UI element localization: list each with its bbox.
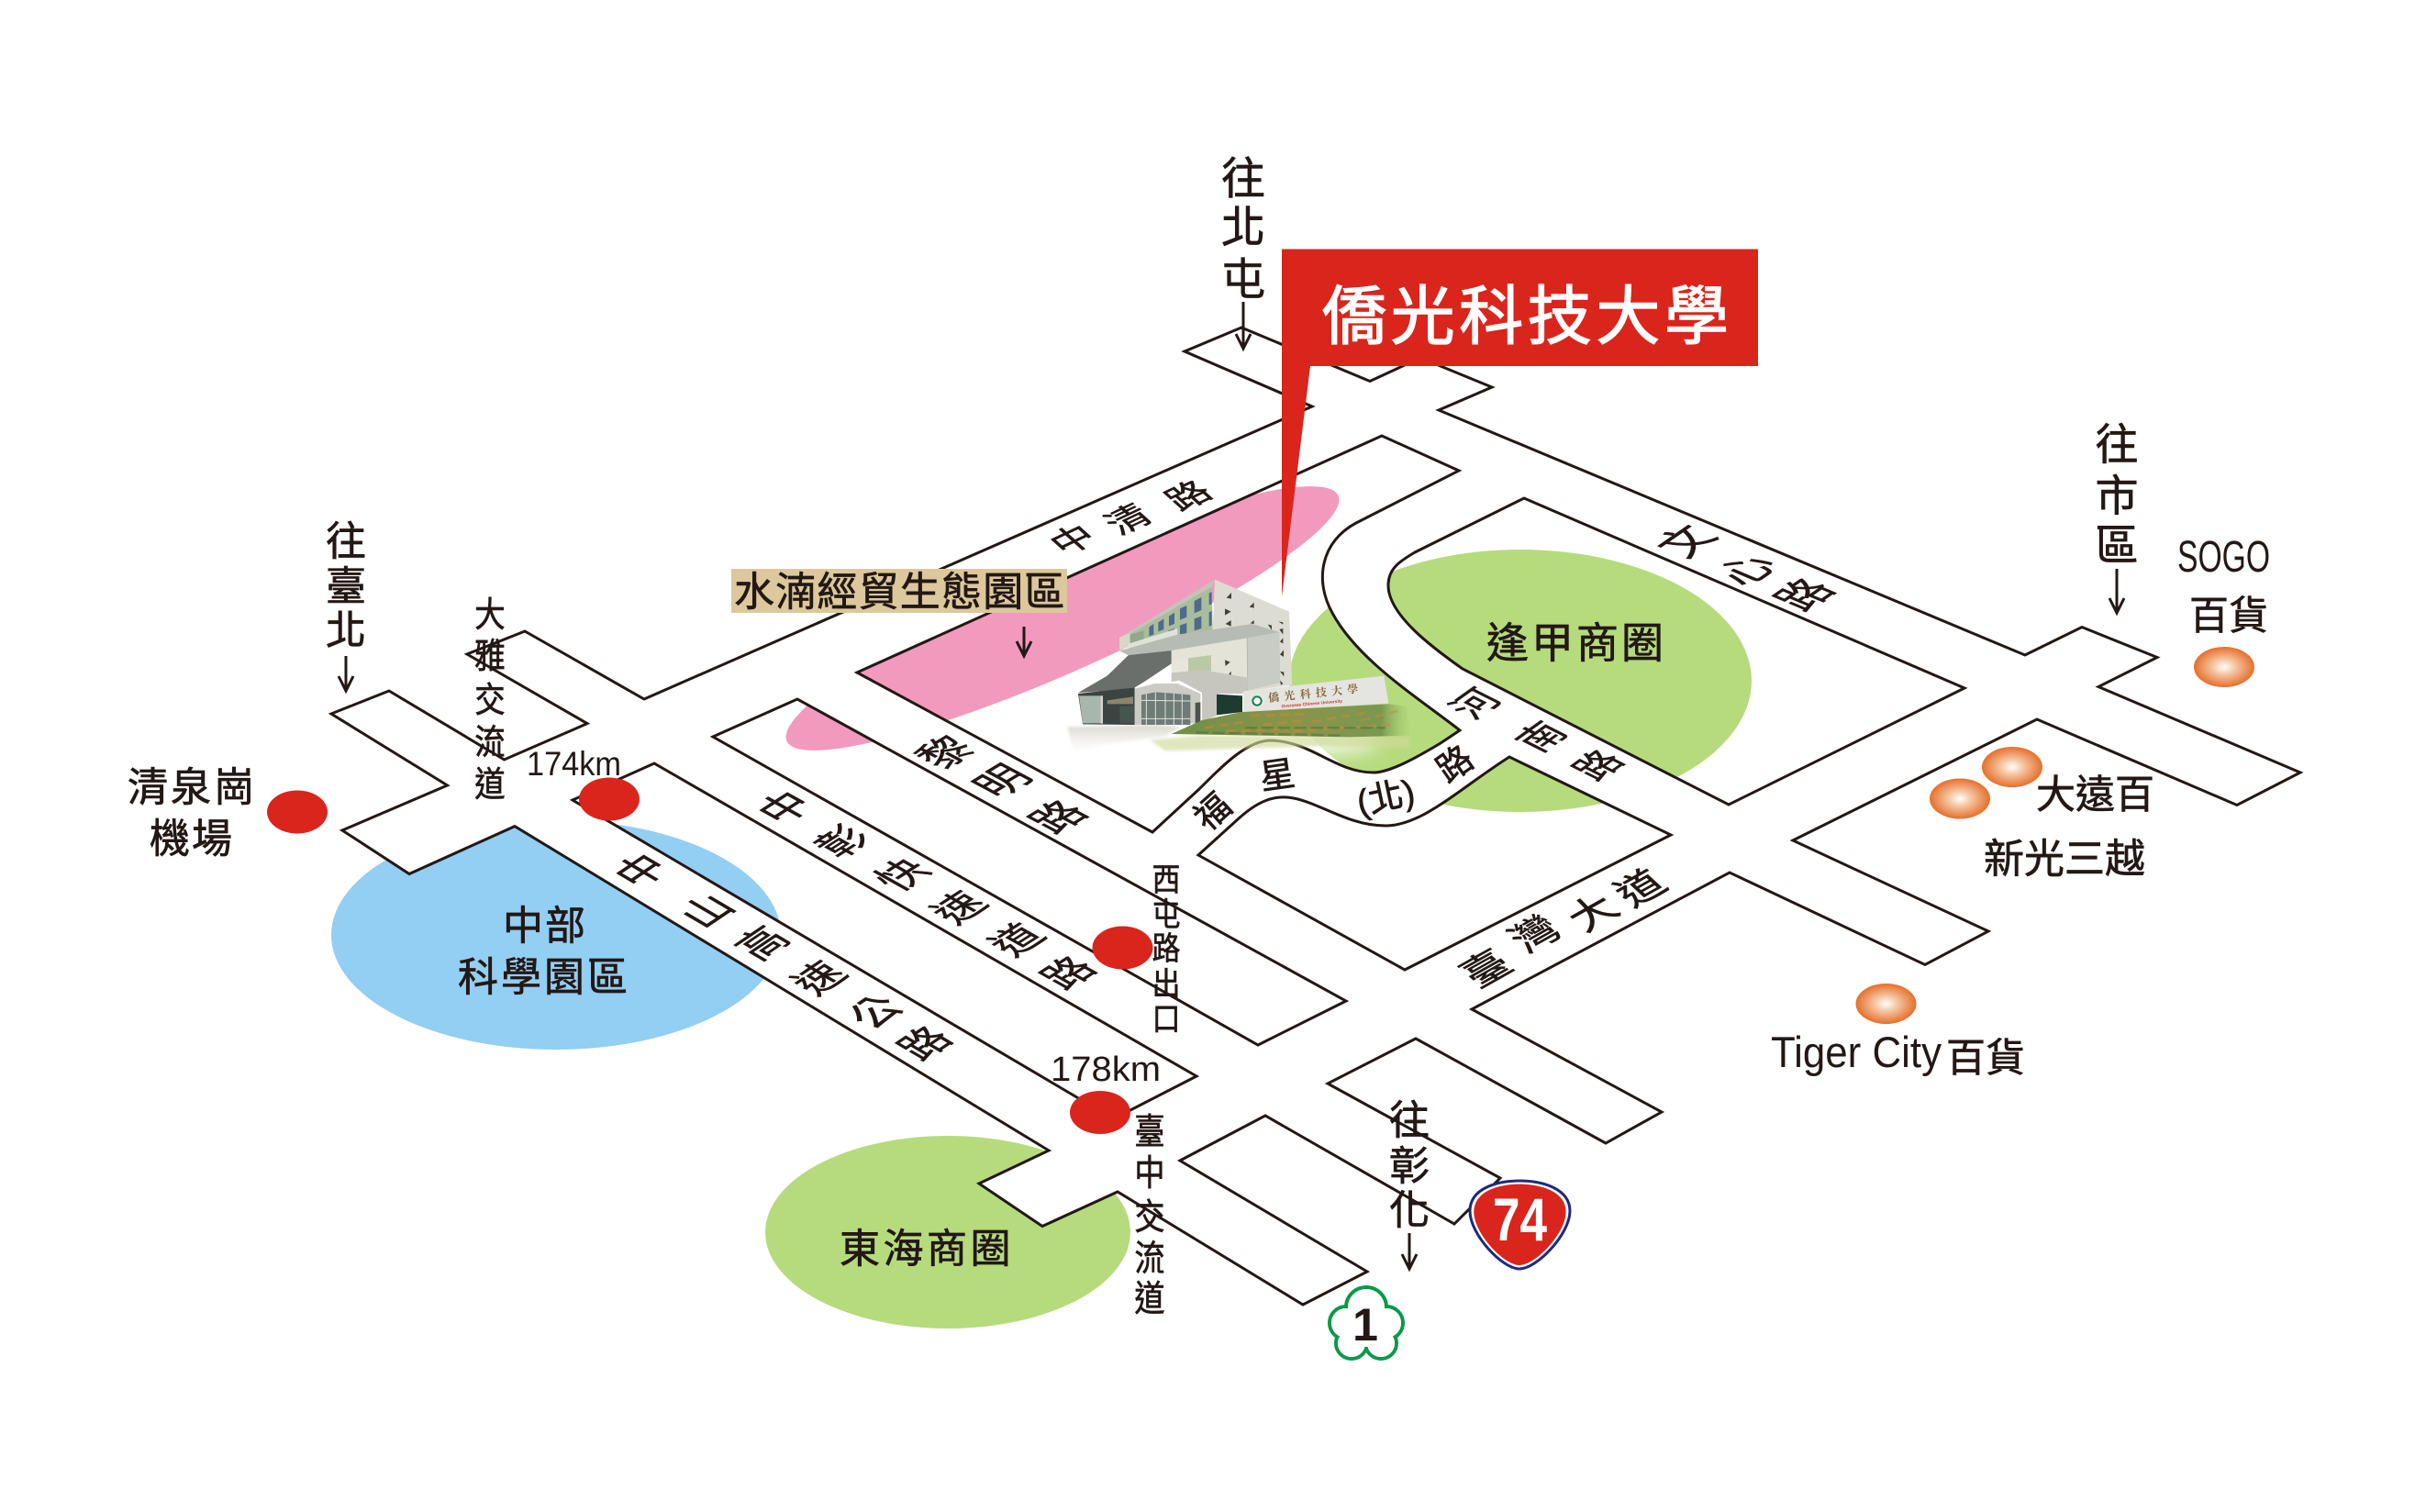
- road label: Zhongzhang Expressway: 快: [865, 852, 940, 897]
- marker: FE21: [1982, 747, 2042, 787]
- road label: Zhongqing Rd: 中: [1042, 519, 1105, 561]
- direction: to Taipei: [326, 519, 366, 691]
- road label: Henan Rd: 南: [1507, 716, 1577, 758]
- campus sign lettering: 僑光科技大學: [1267, 681, 1363, 705]
- direction: to Beitun: 屯: [1221, 256, 1265, 305]
- label: Tiger City department store: 百貨: [1946, 1037, 2025, 1081]
- label: Tunghai shopping district: 東海商圈: [840, 1227, 1014, 1272]
- road label: Taiwan Blvd: 灣: [1500, 908, 1571, 960]
- campus building photo: [1067, 580, 1410, 752]
- ground haze under campus photo: [1060, 721, 1381, 762]
- direction: to city center: 市: [2096, 472, 2138, 520]
- label: Daya interchange: 交: [474, 681, 506, 719]
- direction: to Changhua: 往: [1389, 1098, 1430, 1143]
- direction: to Taipei: 往: [326, 519, 366, 564]
- label: SOGO department store: 百貨: [2189, 595, 2268, 639]
- arrow: to Shuinan park: [1017, 627, 1031, 656]
- zone: Shuinan eco park: [765, 447, 1360, 790]
- callout banner: university name: [1282, 250, 1758, 596]
- road label: Zhongzhang Expressway: [748, 785, 1107, 995]
- road label: Liming Rd: [907, 730, 1099, 840]
- label: Central Taiwan Science Park: 科學園區: [458, 955, 630, 1000]
- icon: provincial highway 74 shield: [1470, 1181, 1570, 1269]
- road label: Sun Yat-sen Freeway: 高: [726, 920, 800, 967]
- label: FE21: 大遠百: [2036, 773, 2154, 817]
- road label: Sun Yat-sen Freeway: 公: [839, 989, 913, 1036]
- road label: Wenxin Rd: 心: [1707, 548, 1789, 592]
- label: Qingquangang airport: 清泉崗: [128, 765, 257, 810]
- marker: 174km interchange: [579, 778, 640, 820]
- campus sign logo: [1252, 696, 1262, 706]
- label: Tiger City department store: [1771, 1028, 2025, 1081]
- road label: Wenxin Rd: [1646, 519, 1847, 617]
- direction: to Taipei: 北: [326, 608, 366, 653]
- label: Taichung interchange: 中: [1134, 1152, 1165, 1194]
- road label: Zhongzhang Expressway: 中: [748, 785, 823, 830]
- road label: Sun Yat-sen Freeway: 中: [605, 848, 679, 895]
- label: Xitun Rd exit: 屯: [1152, 896, 1180, 932]
- direction: to city center: [2096, 420, 2138, 613]
- label: Taichung interchange: 臺: [1134, 1111, 1165, 1152]
- icon: national highway 1 plum blossom: 1: [1352, 1299, 1378, 1351]
- marker: Shin Kong Mitsukoshi: [1930, 778, 1990, 818]
- road label: Taiwan Blvd: 道: [1606, 862, 1676, 914]
- sign label: Shuinan eco park: 水湳經貿生態園區: [734, 570, 1066, 615]
- road label: Fuxing North Rd: 福: [1187, 786, 1240, 839]
- road label: Henan Rd: 河: [1441, 683, 1511, 725]
- road label: Sun Yat-sen Freeway: 速: [783, 955, 857, 1002]
- label: Daya interchange: 大: [474, 595, 506, 634]
- direction: to city center: 往: [2096, 420, 2138, 469]
- road label: Zhongqing Rd: [1042, 475, 1220, 561]
- road label: Sun Yat-sen Freeway: [605, 848, 963, 1067]
- label: Daya interchange: 道: [474, 765, 506, 804]
- marker: Xitun Rd exit: [1092, 927, 1152, 969]
- road label: Wenxin Rd: 路: [1764, 573, 1847, 617]
- road label: Liming Rd: 黎: [907, 730, 986, 776]
- road label: Zhongzhang Expressway: 速: [922, 885, 997, 930]
- direction: to city center: 區: [2096, 521, 2138, 570]
- marker: Qingquangang airport: [267, 791, 328, 833]
- road label: Sun Yat-sen Freeway: 路: [888, 1020, 963, 1067]
- road label: Zhongzhang Expressway: 路: [1031, 951, 1107, 995]
- road label: Taiwan Blvd: 臺: [1452, 943, 1522, 995]
- campus sign English: Overseas Chinese University: [1281, 698, 1343, 708]
- zone: Central Taiwan Science Park: [331, 820, 781, 1050]
- marker: SOGO: [2194, 647, 2254, 687]
- marker: 178km interchange: [1070, 1091, 1130, 1134]
- road label: Fuxing North Rd: 星: [1258, 755, 1297, 797]
- road label: Henan Rd: [1441, 683, 1634, 786]
- road label: Zhongzhang Expressway: 道: [980, 917, 1055, 962]
- label: Fengjia shopping district: 逢甲商圈: [1486, 619, 1666, 667]
- direction: to Beitun: 北: [1221, 204, 1265, 252]
- road label: Fuxing North Rd: (北): [1353, 773, 1419, 823]
- icon: provincial highway 74 shield: 74: [1493, 1185, 1547, 1253]
- label: Central Taiwan Science Park: [458, 904, 630, 1000]
- label: Qingquangang airport: 機場: [150, 817, 234, 862]
- direction: to Beitun: [1221, 155, 1265, 349]
- road network: [331, 328, 2300, 1305]
- label: SOGO department store: SOGO: [2177, 533, 2270, 582]
- label: Taichung interchange: 道: [1134, 1278, 1165, 1319]
- label: Xitun Rd exit: 西: [1152, 862, 1180, 897]
- label: Taichung interchange: 流: [1134, 1238, 1165, 1279]
- direction: to Beitun: 往: [1221, 155, 1265, 204]
- label: 174km: 174km: [527, 745, 621, 783]
- direction: to Changhua: [1389, 1098, 1430, 1269]
- label: Taichung interchange: 交: [1134, 1196, 1165, 1238]
- road label: Sun Yat-sen Freeway: 山: [671, 888, 745, 935]
- icon: national highway 1 plum blossom: [1330, 1287, 1403, 1359]
- road label: Zhongzhang Expressway: 彰: [806, 819, 881, 864]
- road label: Henan Rd: 路: [1564, 744, 1634, 786]
- direction: to Taipei: 臺: [326, 564, 366, 609]
- label: Xitun Rd exit: 出: [1152, 966, 1180, 1002]
- label: Tiger City department store: Tiger City: [1771, 1028, 1942, 1076]
- callout banner: university name: 僑光科技大學: [1322, 281, 1733, 352]
- label: 178km: 178km: [1051, 1051, 1161, 1089]
- road label: Liming Rd: 明: [963, 759, 1043, 805]
- road label: Wenxin Rd: 文: [1646, 519, 1729, 563]
- road label: Taiwan Blvd: 大: [1558, 887, 1629, 939]
- zone: Fengjia shopping district: [1289, 550, 1752, 812]
- road label: Zhongqing Rd: 路: [1158, 475, 1220, 517]
- label: SOGO department store: [2177, 533, 2270, 639]
- road label: Zhongqing Rd: 清: [1097, 499, 1160, 541]
- label: Qingquangang airport: [128, 765, 257, 862]
- marker: Tiger City: [1855, 984, 1916, 1024]
- direction: to Changhua: 彰: [1389, 1144, 1430, 1189]
- road label: Fuxing North Rd: [1187, 739, 1481, 839]
- zone: Tunghai shopping district: [765, 1136, 1130, 1329]
- road label: Fuxing North Rd: 路: [1430, 739, 1481, 791]
- label: Xitun Rd exit: 口: [1152, 1001, 1180, 1037]
- road label: Taiwan Blvd: [1452, 862, 1676, 995]
- direction: to Changhua: 化: [1389, 1188, 1430, 1233]
- label: Daya interchange: 流: [474, 723, 506, 762]
- label: Shin Kong Mitsukoshi: 新光三越: [1984, 837, 2145, 882]
- label: Daya interchange: 雅: [474, 637, 506, 675]
- label: Xitun Rd exit: 路: [1152, 930, 1180, 966]
- label: Central Taiwan Science Park: 中部: [503, 904, 587, 949]
- road label: Liming Rd: 路: [1019, 795, 1099, 840]
